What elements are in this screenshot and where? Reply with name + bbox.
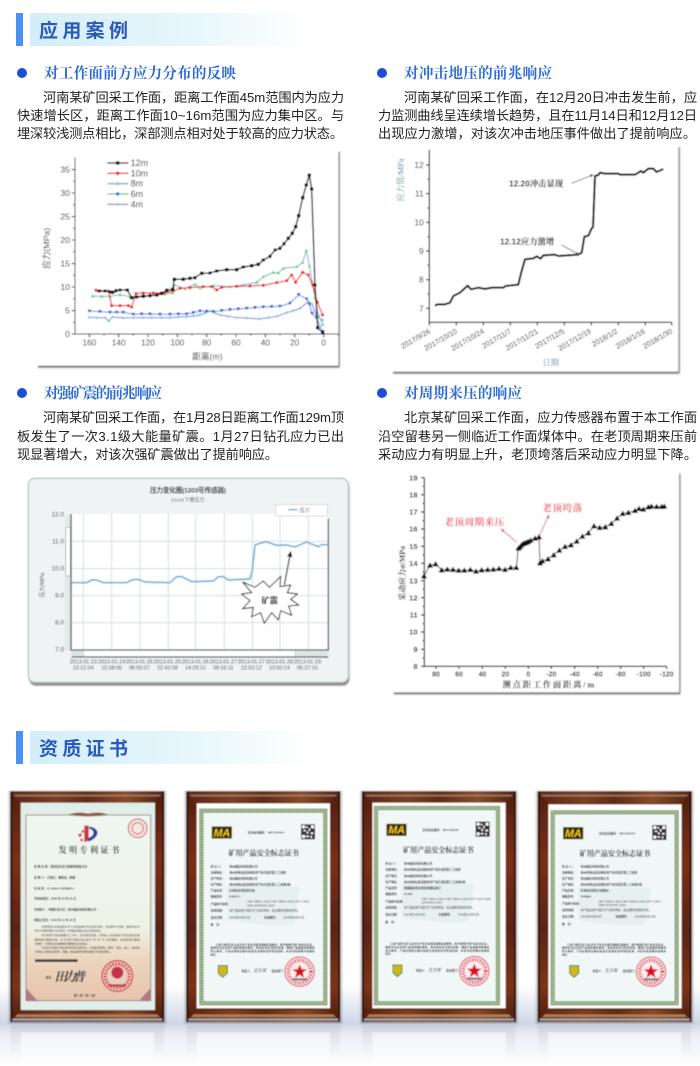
certificate fields: YHW(B) [581,894,591,898]
certificate note: 上述产品符合矿山安全生产有关法律法规和标准要求，准予使用矿用产品安全标志。 [215,942,315,946]
certificate fields: 本产品适用于煤矿井下具有甲烷、煤尘爆炸危险的环境。 [581,908,651,912]
chart legend: 8m [131,179,143,189]
certificate fields: 备 注： [562,922,573,926]
QR code [652,825,666,840]
certificate note: 执行。 [562,952,570,956]
line chart: stress vs distance, five depths: 30 [60,188,70,198]
line chart: stress value over date: 应力值/MPa [395,158,405,202]
callout: periodic weighting: 老顶周期来压 [444,516,505,528]
panel: response to periodic weighting [377,384,697,694]
certificate fields [211,864,310,927]
certificate fields: 持 证 人： [385,862,398,866]
safety badge [570,966,579,977]
certificate fields: 徐州福安科技有限公司 [581,864,609,868]
signature [416,967,460,972]
line chart: pressure change, sensor 1203: 2013-01-23 [70,659,97,665]
national seal [102,961,133,991]
certificate fields: 注册地址： [385,868,399,872]
certificate fields: 徐州福安科技有限公司 [229,877,258,881]
line chart: pressure change, sensor 1203: 10.0 [52,566,64,573]
body text: 河南某矿回采工作面，在12月20日冲击发生前，应 [404,89,697,105]
patent body text: 专利权人的姓名或名称、国籍、地址变更等事项记载在专利登记簿上。 [35,949,113,953]
MA logo: MA [388,825,405,837]
chart legend: 10m [131,168,148,178]
line chart: mining stress vs distance to face: 13 [409,576,418,585]
certificate note: 符合要求。产品在使用过程中如发生变更应及时申请变更，本证书有效期内按规定 [211,949,315,953]
certificate fields: 2006 Q/XZFA01-2024 [247,903,275,907]
certificate fields: 产品执行标准： [385,899,405,903]
framed certificate: mining product safety mark 1: 矿用产品安全标志证书 [228,848,300,857]
certificate fields: GB/T 3836.1-2021 GB/T 3836.4-2021 MT/T 1005- [598,899,661,903]
patent body text: 细则规定缴纳年费。本专利的年费应当在每年 05 月 20 日前缴纳。未按照规定缴纳 [35,937,140,941]
certificate note [562,942,666,956]
certificate note: 上述产品符合矿山安全生产有关法律法规和标准要求，准予使用矿用产品安全标志。 [567,942,666,946]
certificate fields: GB/T 3836.1-2021 GB/T 3836.4-2021 MT/T 1007-2006 [422,897,491,901]
signature: 签发人： [593,969,604,973]
line chart: stress value over date: 2017/9/26 [399,327,432,351]
signature: 签发人： [416,968,427,972]
line chart: stress vs distance, five depths: 40 [261,338,270,348]
line chart: pressure change, sensor 1203: 压力变化图(1203号传感器) [150,485,226,494]
callout: periodic weighting [444,516,517,542]
watermark [401,884,475,922]
callout: 12.20 rock burst [509,175,593,189]
callout: mine tremor starburst [242,577,299,623]
callout: roof collapse [539,502,583,536]
line chart: pressure change, sensor 1203: 05:37:15 [297,666,318,672]
top right seal [128,819,147,838]
line chart: stress value over date: 8 [419,275,424,285]
line chart: mining stress vs distance to face: 80 [432,671,440,678]
certificate fields: 本产品适用于煤矿井下具有甲烷、煤尘爆炸危险的环境。 [229,908,300,912]
body text: 河南某矿回采工作面，距离工作面45m范围内为应力 [43,89,344,105]
line chart: stress value over date: 12 [414,160,424,170]
line chart: stress value over date: 10 [414,217,424,227]
red seal with star [285,957,314,986]
line chart: stress vs distance, five depths: 20 [60,235,70,245]
certificate fields: 徐州福安科技有限公司 [404,862,432,866]
body text: 现显著增大，对该次强矿震做出了提前响应。 [17,446,278,462]
frame reflection [538,1025,691,1066]
line chart: stress vs distance, five depths: 60 [231,338,241,348]
frame reflection [11,1025,164,1066]
line chart: mining stress vs distance to face: 18 [409,490,418,499]
line chart: mining stress vs distance to face: -80 [616,671,626,678]
callout: 12.20 rock burst: 12.20冲击显现 [509,179,564,189]
certificate fields: 注册地址： [562,870,576,874]
line chart: stress value over date: 2017/10/24 [449,327,486,353]
body text [17,89,344,141]
chart legend [276,505,327,516]
line chart: pressure change, sensor 1203: 15:08:05 [101,666,122,672]
line chart: stress vs distance, five depths: 35 [60,165,70,175]
watermark [227,887,300,925]
chart legend: 压力 [300,507,310,514]
chart legend: 6m [131,189,143,199]
bullet dot [377,388,387,398]
framed certificate: mining product safety mark 2: 安全标志编号： MFC130144 [422,828,459,832]
line chart: mining stress vs distance to face: 采动应力σ/MPa [397,546,407,601]
certificate fields: 有效期至： [264,915,278,919]
certificate fields: 徐州福安科技有限公司 [229,864,258,868]
QR code [476,822,490,837]
certificate note: 符合要求。产品在使用过程中如发生变更应及时申请变更，本证书有效期内按规定 [562,949,666,953]
line chart: stress vs distance, five depths: 120 [141,338,155,348]
line chart: mining stress vs distance to face: -20 [546,671,556,678]
certificate note: 符合要求。产品在使用过程中如发生变更应及时申请变更，本证书有效期内按规定 [385,948,490,952]
patent body text: 并在专利登记簿上予以登记。专利权自授权公告之日起生效。 [35,929,103,933]
chart legend: 4m [131,199,143,209]
certificate note: 上述产品符合矿山安全生产有关法律法规和标准要求，准予使用矿用产品安全标志。 [390,942,489,946]
framed certificate: invention patent [9,791,166,1066]
certificate fields: 注册地址： [211,870,225,874]
line chart: stress value over date: 9 [419,246,424,256]
line chart: pressure change, sensor 1203: 2013-01-29 [294,659,321,665]
certificate fields: 生产地址： [562,882,576,886]
line chart: stress value over date: 2017/11/7 [480,327,513,350]
line chart: mining stress vs distance to face: 14 [409,559,418,568]
red seal with star [460,956,489,986]
safety badge [218,966,227,977]
patent body text: 专利证书记载专利权登记时的法律状况。专利权的转移、质押、无效、终止、恢复和 [41,945,140,949]
line chart: stress vs distance, five depths: 0 [65,329,70,339]
body text: 河南某矿回采工作面，在1月28日距离工作面129m顶 [43,409,344,425]
section header: application cases: 应用案例 [39,19,128,42]
certificate fields: 适用范围： [211,908,225,912]
line chart: stress value over date: 2017/10/10 [422,327,459,353]
line chart: stress value over date: 2018/1/16 [614,327,647,351]
line chart: stress vs distance, five depths: 20 [290,338,300,348]
certificate fields: 适用范围： [385,906,399,910]
line chart: pressure change, sensor 1203: 06:16:11 [213,666,234,672]
callout: 12.12 stress surge [500,237,579,255]
patent fields: 专 利 号：ZL 2009 1 0025895.4 [34,887,74,891]
line chart: mining stress vs distance to face: 测点距工作面距离/m [502,679,594,689]
line chart: stress vs distance, five depths: 应力(MPa) [40,228,51,269]
line chart: mining stress vs distance to face: -60 [593,671,603,678]
certificate fields: 产品名称： [385,886,399,890]
watermark [578,887,651,926]
signature: 王力军 [428,967,442,972]
line chart: pressure change, sensor 1203: 13:50:14 [269,666,290,672]
signature: 签发人： [241,969,253,973]
line chart: mining stress vs distance to face: 0 [526,671,530,678]
line chart: mining stress vs distance to face: 20 [501,671,509,678]
certificate fields: 生产地址： [385,880,399,884]
framed certificate: mining product safety mark 3 [536,791,693,1066]
certificate note: 执行。 [385,952,393,956]
certificate fields: 产品名称： [562,888,576,892]
line chart: mining stress vs distance to face: 11 [410,611,418,620]
line chart: pressure change, sensor 1203: 2013-01-25 [126,659,153,665]
line chart: stress vs distance, five depths [37,150,340,368]
certificate note: 取得安全标志的产品应按规定使用，持证单位应当接受监督，确保产品质量持续稳定 [211,946,315,950]
line chart: mining stress vs distance to face: 16 [409,525,418,534]
line chart: pressure change, sensor 1203: 8.0 [55,620,64,627]
line chart: stress vs distance, five depths: 80 [202,338,212,348]
certificate fields: 2023年12月30日 [404,913,425,917]
line chart: stress value over date: 2017/12/19 [556,327,593,353]
line chart: mining stress vs distance to face: 10 [409,628,418,637]
patent fields: 发 明 人：王恩元；窦林名；陈颖 [34,876,75,880]
callout: roof collapse: 老顶垮落 [542,502,583,514]
wooden frame [360,791,518,1024]
line chart: mining stress vs distance to face: 9 [413,645,418,654]
framed certificate: invention patent: 第 1 页（共 1 页） [74,994,97,998]
certificate fields: 备 注： [385,920,397,924]
patent fields: 专利申请日：2009 年 05 月 20 日 [34,897,76,901]
line chart: pressure change, sensor 1203: 21141下巷压力 [171,496,204,503]
signature: 发证部门： [446,968,460,972]
certificate fields: 产品名称： [211,889,225,893]
chart legend [107,158,148,209]
certificate fields: 生产地址： [211,883,225,887]
patent fields: 专利权人：中国矿业大学；徐州福安科技有限公司 [34,907,96,911]
line chart: pressure change, sensor 1203: 2013-01-24 [98,659,125,665]
framed certificate: mining product safety mark 1: 安全标志编号： MFC130144 [248,831,284,835]
certificate fields: Q/XZFA01-2023 [422,901,443,905]
framed certificate: mining product safety mark 3: 安全标志编号： MFC130144 [599,831,636,835]
red seal with star [636,957,666,986]
signature: 王力军 [253,968,267,973]
panel: precursor response to rock burst [377,64,697,374]
certificate fields: 生产单位： [211,877,225,881]
MA logo: MA [214,827,230,839]
body text: 力监测曲线呈连续增长趋势，且在11月14日和12月12日 [378,108,697,123]
line chart: pressure change, sensor 1203 [28,478,349,686]
line chart: stress vs distance, five depths: 160 [82,338,97,348]
certificate fields: 持 证 人： [211,864,224,868]
signature: 发证部门： [271,969,285,973]
certificate fields: 发证日期： [211,915,225,919]
signature [593,968,637,973]
callout: mine tremor starburst: 矿震 [261,595,279,605]
line chart: mining stress vs distance to face: -40 [570,671,580,678]
body text [378,89,697,141]
certificate fields: 规格型号： [385,892,399,896]
framed certificate: invention patent: 发明专利证书 [58,845,120,855]
line chart: pressure change, sensor 1203: 9.0 [55,593,64,600]
certificate fields: 2024年06月23日 [229,915,251,919]
certificate fields: 2029年06月23日 [635,915,656,919]
director signature: 局长 [46,976,51,980]
certificate fields: 发证日期： [385,913,399,917]
certificate fields: 有效期至： [439,913,453,917]
line chart: mining stress vs distance to face: 40 [478,671,486,678]
panel heading: 对周期来压的响应 [404,384,522,402]
wooden frame [9,791,166,1024]
panel heading: 对冲击地压的前兆响应 [404,64,552,82]
framed certificate: mining product safety mark 3: 矿用产品安全标志证书 [580,849,651,858]
line chart: stress value over date: 日期 [542,358,559,368]
section header: application cases [16,13,310,46]
framed certificate: mining product safety mark 2: 矿用产品安全标志证书 [403,846,474,855]
certificate fields: 持 证 人： [562,864,575,868]
certificate fields: 生产单位： [562,876,576,880]
line chart: pressure change, sensor 1203: 22:42:08 [157,666,178,672]
body text: 北京某矿回采工作面，应力传感器布置于本工作面 [404,409,697,425]
frame reflection [187,1025,340,1066]
certificate fields: 徐州市铜山区高新技术产业开发区第三工业园 [581,870,637,874]
line chart: stress value over date: 2018/1/30 [641,327,674,351]
line chart: pressure change, sensor 1203: 14:29:10 [185,666,206,672]
line chart: pressure change, sensor 1203: 2013-01-26 [182,659,209,665]
certificate fields: 产品执行标准： [562,902,582,906]
body text [378,409,697,462]
patent fields: 授权公告日：2010 年 12 月 29 日 [34,918,76,922]
certificate fields: 徐州福安科技有限公司 [581,876,609,880]
certificate note [385,942,490,956]
certificate fields: 矿用本安型应用分站 [229,889,255,893]
certificates gallery [9,791,693,1066]
certificate fields: 规格型号： [211,895,225,899]
certificate fields [385,862,491,924]
line chart: stress value over date: 7 [419,303,424,313]
line chart: pressure change, sensor 1203: 11.0 [52,539,64,546]
scroll bars and axis frame [65,514,328,657]
certificate fields: 徐州市铜山区高新技术产业开发区第三工业园 [229,870,286,874]
framed certificate: mining product safety mark 1 [185,791,342,1066]
line chart: stress value over date: 2018/1/2 [590,327,619,349]
QR code [301,824,315,839]
body text: 出现应力激增，对该次冲击地压事件做出了提前响应。 [378,125,696,141]
certificate fields: KJ397-F [229,895,241,899]
callout: 12.12 stress surge: 12.12应力激增 [500,237,554,247]
line chart: pressure change, sensor 1203: 2013-01-27 [238,659,265,665]
certificate fields: 规格型号： [562,894,576,898]
line chart: mining stress vs distance to face: 19 [409,473,418,482]
line chart: pressure change, sensor 1203: 2013-01-25 [154,659,181,665]
certificate fields: 生产单位： [385,874,399,878]
section header: qualification certificates [16,731,310,764]
patent fields [34,865,96,922]
patent office emblem [78,826,97,842]
body text: 板发生了一次3.1级大能量矿震。1月27日钻孔应力已出 [17,429,344,444]
certificate fields: 徐州市铜山区高新技术产业开发区第三工业园B栋 [581,882,642,886]
arrow to pressure step [284,552,291,585]
certificate fields: 徐州福安科技有限公司 [404,874,432,878]
MA logo: MA [565,828,582,840]
signature: 发证部门： [623,969,637,973]
patent body text: 本发明经过本局依照中华人民共和国专利法进行审查，决定授予专利权，颁发本证书 [41,925,140,929]
body text: 快速增长区，距离工作面10~16m范围为应力集中区。与 [17,107,344,123]
line chart: pressure change, sensor 1203: 22:03:12 [241,666,262,672]
certificate fields: 徐州市铜山区高新技术产业开发区第三工业园 [404,868,461,872]
certificate fields: 徐州市铜山区高新技术产业开发区第三工业园B栋 [229,883,291,887]
body text [17,409,344,462]
line chart: stress vs distance, five depths: 距离(m) [192,351,223,362]
line chart: stress vs distance, five depths: 140 [112,338,126,348]
line chart: mining stress vs distance to face: 17 [409,508,418,517]
certificate fields: KJ439 [404,892,413,896]
certificate fields: 发证日期： [562,915,576,919]
line chart: stress value over date [392,145,680,374]
line chart: mining stress vs distance to face: -120 [660,671,674,678]
wooden frame [185,791,342,1024]
body text: 沿空留巷另一侧临近工作面煤体中。在老顶周期来压前 [378,428,697,444]
certificate fields: 2028年12月30日 [458,913,479,917]
certificate note: 取得安全标志的产品应按规定使用，持证单位应当接受监督，确保产品质量持续稳定 [385,945,490,949]
line chart: mining stress vs distance to face: 60 [455,671,463,678]
certificate fields: 产品执行标准： [211,902,230,906]
bullet dot [17,68,27,78]
line chart: mining stress vs distance to face [392,472,680,694]
panel heading: 对强矿震的前兆响应 [44,384,162,402]
line chart: mining stress vs distance to face: -100 [637,671,651,678]
line chart: mining stress vs distance to face: 8 [413,662,418,671]
certificate fields [562,864,661,926]
certificate fields: 徐州市铜山区高新技术产业开发区第三工业园B栋 [404,880,466,884]
patent body text: 年费的，专利权自应当缴纳年费期满之日起终止。 [35,941,90,945]
certificate backdrop band [0,985,700,1066]
certificate fields: 备 注： [211,923,222,927]
section header: qualification certificates: 资质证书 [39,737,128,760]
wooden frame [536,791,693,1024]
line chart: mining stress vs distance to face: 12 [409,593,418,602]
line chart: stress vs distance, five depths: 0 [321,338,326,348]
bullet dot [377,68,387,78]
line chart: pressure change, sensor 1203: 06:55:07 [129,666,150,672]
frame reflection [362,1025,516,1066]
chart legend: 12m [131,158,148,168]
patent body text: 本专利的专利权期限为二十年，自申请日起算。专利权人应当依照专利法及其实施 [41,933,140,937]
signature [241,968,285,973]
patent fields: 发 明 名 称：煤岩钻孔应力监测系统及方法 [34,865,87,869]
line chart: mining stress vs distance to face: 15 [409,542,418,551]
certificate fields: 2006 Q/XZFA01-2024 [598,903,626,907]
certificate note [211,942,315,956]
line chart: stress value over date: 2017/12/5 [533,327,566,351]
director signature: 田力普 [55,970,87,984]
panel: precursor response to strong mine tremor [17,384,349,686]
line chart: stress vs distance, five depths: 100 [170,338,185,348]
panel: stress distribution ahead of face [17,64,344,368]
line chart: pressure change, sensor 1203: 2013-01-27 [210,659,237,665]
line chart: stress vs distance, five depths: 25 [60,212,70,222]
certificate fields: 地面输出本安型应用通信接口 [404,886,441,890]
patent body text [35,925,140,953]
body text: 采动应力有明显上升，老顶垮落后采动应力明显下降。 [378,447,697,462]
line chart: stress value over date: 2017/11/21 [504,327,540,352]
certificate fields: 矿用本安型压力监测仪 [581,888,609,892]
line chart: stress vs distance, five depths: 5 [65,306,70,316]
bullet dot [17,388,27,398]
line chart: pressure change, sensor 1203: 2013-01-28 [266,659,293,665]
line chart: pressure change, sensor 1203: 12.0 [52,511,64,518]
certificate fields: 2029年06月23日 [283,915,305,919]
signature: 王力军 [605,968,618,973]
certificate fields: 适用范围： [562,908,576,912]
certificate note: 执行。 [211,952,218,956]
safety badge [393,965,402,977]
line chart: pressure change, sensor 1203: 23:21:04 [73,666,94,672]
panel heading: 对工作面前方应力分布的反映 [44,64,236,82]
certificate fields: 有效期至： [615,915,629,919]
certificate fields: 2024年06月23日 [581,915,602,919]
line chart: stress vs distance, five depths: 15 [60,259,70,269]
certificate note: 取得安全标志的产品应按规定使用，持证单位应当接受监督，确保产品质量持续稳定 [562,946,666,950]
line chart: pressure change, sensor 1203: 7.0 [55,647,64,654]
certificate fields: 本产品适用于煤矿井下具有甲烷、煤尘爆炸危险的环境。 [404,906,475,910]
body text: 埋深较浅测点相比，深部测点相对处于较高的应力状态。 [17,125,343,141]
framed certificate: mining product safety mark 2 [360,791,518,1066]
certificate fields: GB/T 3836.1-2021 GB/T 3836.4-2021 MT/T 1005- [247,900,310,904]
line chart: stress vs distance, five depths: 10 [60,282,70,292]
line chart: pressure change, sensor 1203: 压力/MPa [38,572,46,597]
line chart: stress value over date: 11 [415,189,424,199]
